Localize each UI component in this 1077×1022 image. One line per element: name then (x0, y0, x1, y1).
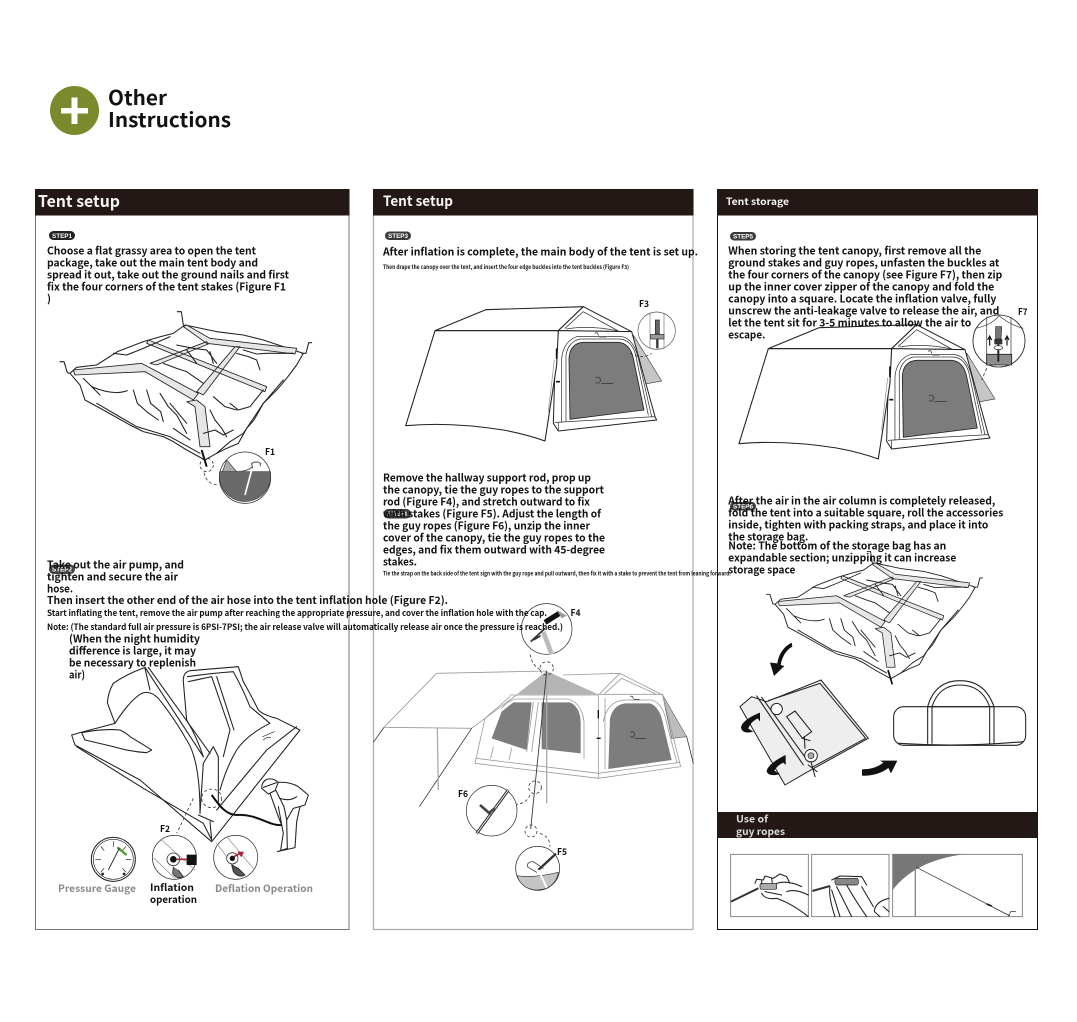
callout: F1 stake in ground (200, 445, 275, 503)
callout: F6 rope adjuster (458, 785, 517, 836)
step badge: STEP2 (49, 564, 75, 574)
callout: F3 buckle detail (630, 297, 675, 357)
panel header: Tent setup (373, 189, 694, 216)
callout: F5 stake in ground (516, 845, 567, 890)
icon: olive plus badge (50, 86, 99, 135)
text block: canopy support and guy ropes: cover of the canopy, tie the guy ropes to the (383, 530, 605, 545)
text block: spreading the tent: package, take out the main tent body and (47, 255, 258, 270)
text block: storing the canopy (728, 243, 1003, 342)
text block: canopy support and guy ropes: the guy ropes (Figure F6), unzip the inner (383, 518, 590, 533)
text block: spreading the tent (47, 243, 290, 306)
panel: tent storage (717, 189, 1038, 930)
step badge: STEP6 (730, 502, 756, 510)
text block: air pump and inflation: Then insert the other end of the air hose into the tent inflation hole (Figure F2). (47, 593, 448, 608)
icon: inflation valve with pump (152, 835, 197, 879)
callout: F7 buckle detail: F7 (1018, 305, 1028, 318)
text block: air pump and inflation: (When the night humidity (69, 631, 200, 646)
text block: folding into the storage bag: After the air in the air column is completely released, (727, 493, 995, 508)
text block: storing the canopy: ground stakes and guy ropes, unfasten the buckles at (728, 255, 1000, 270)
illustration: pitched tent with canopy (406, 307, 662, 441)
callout: F1 stake in ground: F1 (265, 445, 275, 458)
callout: F5 stake in ground: F5 (557, 845, 567, 858)
text block: air pump and inflation: Take out the air pump, and (47, 557, 184, 572)
text block: spreading the tent: ) (47, 291, 51, 306)
step badge: STEP4: STEP4 (387, 512, 408, 518)
text block: storing the canopy: canopy into a square. Locate the inflation valve, fully (728, 291, 996, 306)
callout: F6 rope adjuster: F6 (458, 787, 468, 800)
step badge: STEP3 (385, 232, 411, 240)
text block: storing the canopy: the four corners of the canopy (see Figure F7), then zip (728, 267, 1003, 282)
heading text: Other (108, 82, 167, 111)
callout: F7 buckle detail (973, 305, 1028, 380)
text block: folding into the storage bag: Note: The bottom of the storage bag has an (728, 538, 946, 553)
label: Inflation operation: Inflation (150, 879, 194, 894)
text block: canopy support and guy ropes: rod (Figure F4), and stretch outward to fix (383, 494, 590, 509)
text block: spreading the tent: spread it out, take out the ground nails and first (47, 267, 290, 282)
title: Other Instructions (50, 82, 231, 135)
callout: F3 buckle detail: F3 (639, 297, 649, 310)
text block: air pump and inflation: hose. (47, 581, 73, 596)
illustration: guy rope staked at 45 degrees (893, 854, 1022, 917)
text block: canopy support and guy ropes (383, 470, 731, 578)
callout: F4 guy rope on support rod: F4 (570, 606, 581, 619)
panel header: Tent storage: Tent storage (726, 193, 789, 208)
step badge: STEP5: STEP5 (733, 234, 754, 240)
step badge: STEP3: STEP3 (388, 234, 409, 240)
section header: Use of guy ropes: guy ropes (736, 823, 785, 838)
illustration: inflated tent frame with person pumping (72, 667, 308, 852)
text block: canopy support and guy ropes: Tie the strap on the back side of the tent sign with the guy rope and pull outward, then fix it with a stake to prevent the tent from leaning forward. (383, 570, 731, 578)
icon: pressure gauge (91, 837, 135, 881)
label: Inflation operation: operation (150, 891, 197, 906)
section header: Use of guy ropes (717, 810, 1038, 838)
text block: air pump and inflation: Start inflating the tent, remove the air pump after reaching the appropriate pressure, and cover the inflation hole with the cap. (47, 607, 547, 619)
illustration: tent spread flat with stakes (60, 312, 312, 467)
text block: storing the canopy: When storing the tent canopy, first remove all the (728, 243, 981, 258)
label: Inflation operation (150, 879, 197, 906)
text block: canopy support and guy ropes: edges, and fix them outward with 45-degree (383, 542, 605, 557)
text block: after inflation: Then drape the canopy over the tent, and insert the four edge buckles into the tent buckles (Figure F3) (383, 263, 629, 271)
panel: tent setup steps 1 and 2 (35, 188, 563, 930)
text block: air pump and inflation: be necessary to replenish (69, 655, 196, 670)
illustration: hands adjusting guy rope 1 (731, 854, 808, 917)
label: Pressure Gauge: Pressure Gauge (58, 880, 136, 895)
text block: after inflation (382, 245, 698, 271)
illustration: tent with extended canopy and guy ropes (373, 654, 693, 847)
arrow: from tent to folded sheet (770, 643, 792, 676)
panel header: Tent setup (35, 188, 350, 216)
text block: folding into the storage bag: storage space (728, 562, 795, 577)
text block: storing the canopy: unscrew the anti-leakage valve to release the air, and (728, 303, 999, 318)
text block: storing the canopy: let the tent sit for 3-5 minutes to allow the air to (728, 315, 972, 330)
text block: air pump and inflation (47, 557, 563, 682)
panel header: Tent setup: Tent setup (383, 191, 453, 211)
step badge: STEP2: STEP2 (52, 568, 73, 574)
label: Deflation Operation: Deflation Operation (215, 880, 313, 895)
text block: storing the canopy: up the inner cover zipper of the canopy and fold the (728, 279, 994, 294)
panel header: Tent setup: Tent setup (38, 188, 120, 212)
icon: deflation valve with arrow (214, 835, 258, 879)
section header: Use of guy ropes: Use of (736, 810, 769, 826)
text block: storing the canopy: escape. (728, 327, 765, 342)
text block: after inflation: After inflation is complete, the main body of the tent is set up. (382, 245, 698, 260)
text block: spreading the tent: fix the four corners of the tent stakes (Figure F1 (47, 279, 286, 294)
illustration: hands adjusting guy rope 2 (812, 854, 889, 917)
text block: canopy support and guy ropes: the canopy, tie the guy ropes to the support (383, 482, 605, 497)
step badge: STEP1: STEP1 (52, 234, 73, 240)
text block: air pump and inflation: tighten and secure the air (47, 569, 178, 584)
icon: storage bag (894, 681, 1026, 745)
illustration: deflated folded tent (766, 551, 982, 684)
text block: canopy support and guy ropes: Remove the hallway support rod, prop up (383, 470, 591, 485)
text block: folding into the storage bag (727, 493, 1003, 577)
step badge: STEP6: STEP6 (733, 504, 754, 510)
text block: folding into the storage bag: the storage bag. (728, 529, 808, 544)
label: F2: F2 (160, 822, 170, 835)
panel: tent setup steps 3 and 4 (373, 189, 731, 930)
step badge: STEP1 (49, 231, 75, 240)
text block: folding into the storage bag: inside, tighten with packing straps, and place it into (728, 517, 989, 532)
text block: spreading the tent: Choose a flat grassy area to open the tent (47, 243, 257, 258)
callout: F4 guy rope on support rod (521, 604, 581, 654)
step badge: STEP4 (384, 509, 411, 518)
heading text (108, 82, 231, 133)
text block: folding into the storage bag: expandable section; unzipping it can increase (728, 550, 956, 565)
panel header: Tent storage (717, 189, 1038, 216)
illustration: pitched tent with canopy (739, 325, 995, 459)
text block: air pump and inflation: Note: (The standard full air pressure is 6PSI-7PSI; the air release valve will automatically release air once the pressure is reached.) (47, 621, 563, 633)
text block: air pump and inflation: air) (69, 667, 85, 682)
illustration: rolling the folded tent (740, 680, 868, 785)
step badge: STEP5 (730, 232, 756, 240)
heading text: Instructions (108, 104, 231, 133)
arrow: toward storage bag (862, 761, 897, 776)
text block: air pump and inflation: difference is large, it may (69, 643, 196, 658)
text block: canopy support and guy ropes: stakes. (383, 554, 417, 569)
text block: canopy support and guy ropes: with stakes (Figure F5). Adjust the length of (383, 506, 602, 521)
text block: folding into the storage bag: fold the tent into a suitable square, roll the accessories (728, 505, 1003, 520)
